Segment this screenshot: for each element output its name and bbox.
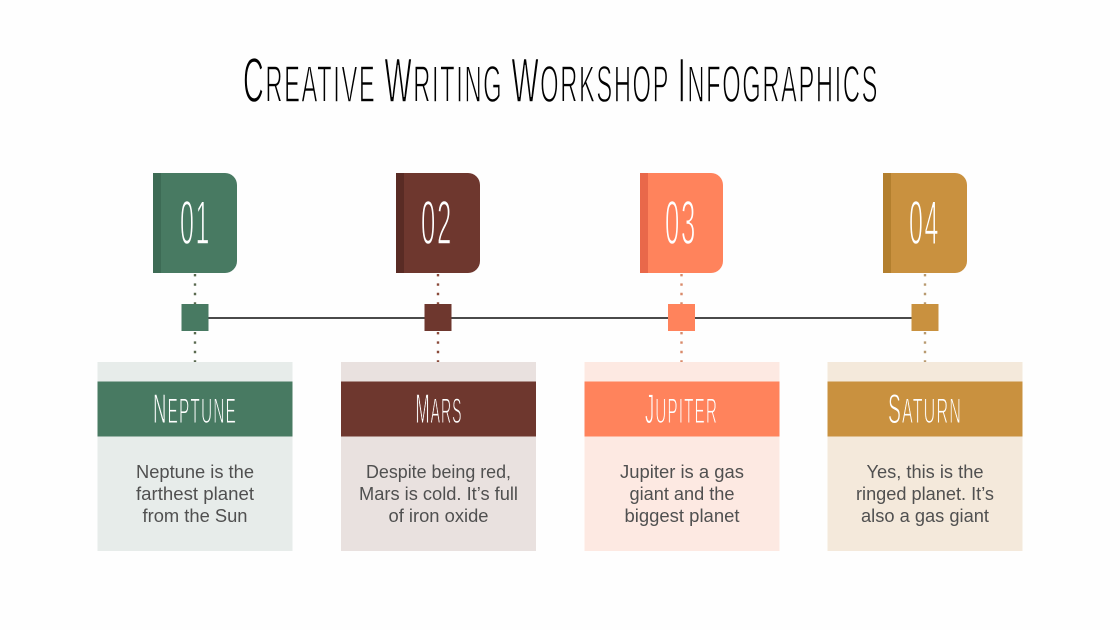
header band xyxy=(584,382,780,436)
panel: 03 Jupiter xyxy=(584,173,780,551)
description: giant and the xyxy=(630,484,734,504)
panel: 02 Mars xyxy=(341,173,536,551)
heading: Saturn: SATURN xyxy=(888,385,962,432)
title: CREATIVE WRITING WORKSHOP INFOGRAPHICS xyxy=(243,46,879,116)
panel: 01 Neptune: 01 xyxy=(180,189,211,258)
description: Jupiter is a gas xyxy=(620,462,744,482)
card background xyxy=(98,362,292,551)
icon: book 01 xyxy=(153,173,237,273)
timeline marker 02 xyxy=(424,304,452,331)
description: Yes, this is the xyxy=(866,462,984,482)
timeline marker 01 xyxy=(182,304,208,331)
description xyxy=(359,462,518,526)
description: ringed planet. It’s xyxy=(856,484,994,504)
description: from the Sun xyxy=(142,506,248,526)
panel: 04 Saturn: 04 xyxy=(909,189,940,258)
panel: 03 Jupiter: JUPITER xyxy=(645,385,718,432)
timeline connector line xyxy=(195,317,925,319)
card background xyxy=(828,362,1022,551)
card background xyxy=(341,362,536,551)
description: of iron oxide xyxy=(388,506,488,526)
description xyxy=(620,462,744,526)
description: Mars is cold. It’s full xyxy=(359,484,518,504)
description: farthest planet xyxy=(136,484,254,504)
description: also a gas giant xyxy=(861,506,989,526)
description xyxy=(856,462,994,526)
timeline marker 04 xyxy=(912,304,938,331)
timeline marker 03 xyxy=(668,304,695,331)
icon: book 02 xyxy=(396,173,480,273)
icon: book 03 xyxy=(640,173,723,273)
panel: 03 Jupiter: 03 xyxy=(665,189,697,258)
panel: 04 Saturn xyxy=(828,173,1022,551)
description: Despite being red, xyxy=(366,462,511,482)
panel: 01 Neptune xyxy=(98,173,292,551)
panel: 02 Mars: 02 xyxy=(421,189,453,258)
header band xyxy=(98,382,292,436)
card background xyxy=(584,362,780,551)
panel: 01 Neptune: NEPTUNE xyxy=(153,385,237,432)
header band xyxy=(341,382,536,436)
panel: 02 Mars: MARS xyxy=(416,385,462,432)
description xyxy=(136,462,254,526)
header band xyxy=(828,382,1022,436)
description: Neptune is the xyxy=(136,462,254,482)
icon: book 04 xyxy=(883,173,967,273)
description: biggest planet xyxy=(624,506,740,526)
